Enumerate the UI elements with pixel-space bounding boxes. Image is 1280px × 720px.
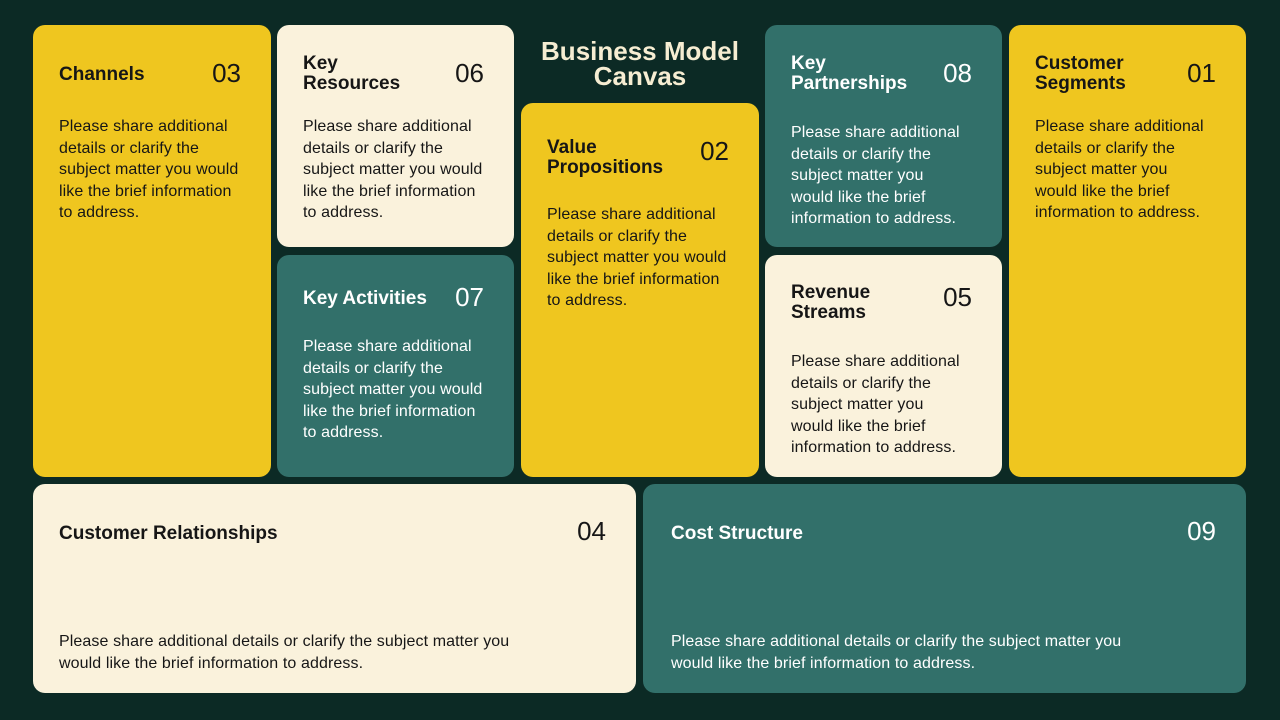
heading: key resources (303, 53, 400, 94)
panel: channels (33, 25, 271, 477)
text: value propositions body: subject matter you would (547, 249, 726, 266)
heading: key resources: Resources (303, 72, 400, 94)
title (541, 36, 739, 91)
number 03: 03 (212, 58, 241, 88)
text: key partnerships body: details or clarify the (791, 146, 931, 162)
panel: key activities (277, 255, 514, 477)
heading: customer segments (1035, 53, 1126, 94)
text: key partnerships body: subject matter you (791, 167, 924, 184)
text: key partnerships body (791, 124, 960, 227)
number 09: 09 (1187, 516, 1216, 546)
text: customer segments body: details or clarify the (1035, 140, 1175, 156)
heading: key partnerships (791, 53, 907, 94)
title: Business Model (541, 36, 739, 66)
text: customer relationships body: Please share additional details or clarify the subject matter you (59, 633, 509, 650)
heading: customer relationships: Customer Relationships (59, 523, 278, 544)
text: cost structure body (671, 633, 1121, 672)
text: channels body: to address. (59, 204, 139, 221)
number 04: 04 (577, 516, 606, 546)
text: key partnerships body: information to address. (791, 210, 956, 227)
text: revenue streams body: would like the brief (791, 418, 926, 434)
heading: customer segments: Segments (1035, 72, 1126, 94)
text: value propositions body: details or clarify the (547, 228, 687, 244)
text: key resources body: like the brief information (303, 182, 475, 200)
heading: key partnerships: Key (791, 53, 826, 74)
heading: value propositions: Value (547, 137, 597, 158)
text: channels body: Please share additional (59, 118, 228, 135)
text: channels body: details or clarify the (59, 140, 199, 156)
text: value propositions body: to address. (547, 292, 627, 309)
text: customer segments body: Please share additional (1035, 118, 1204, 135)
heading: cost structure: Cost Structure (671, 523, 803, 544)
text: value propositions body: Please share additional (547, 206, 716, 223)
text: cost structure body: Please share additional details or clarify the subject matter you (671, 633, 1121, 650)
heading: revenue streams: Streams (791, 302, 866, 322)
number 07: 07 (455, 282, 484, 312)
text: key activities body (303, 338, 482, 441)
text: customer relationships body: would like the brief information to address. (59, 654, 363, 672)
panel: cost structure (643, 484, 1246, 693)
heading: customer segments: Customer (1035, 53, 1124, 74)
text: key resources body: to address. (303, 204, 383, 221)
heading: channels: Channels (59, 64, 145, 85)
text: revenue streams body: information to address. (791, 439, 956, 456)
heading: revenue streams: Revenue (791, 282, 870, 303)
number 05: 05 (943, 282, 972, 312)
text: customer segments body: would like the brief (1035, 182, 1170, 200)
text: channels body (59, 118, 238, 221)
text: value propositions body: like the brief information (547, 270, 719, 288)
heading: key activities: Key Activities (303, 288, 427, 309)
number 01: 01 (1187, 58, 1216, 88)
heading: value propositions (547, 137, 663, 178)
number 08: 08 (943, 58, 972, 88)
text: key activities body: details or clarify the (303, 360, 443, 376)
text: channels body: like the brief information (59, 182, 231, 200)
text: revenue streams body: subject matter you (791, 396, 924, 413)
text: key activities body: like the brief information (303, 402, 475, 420)
text: key activities body: to address. (303, 424, 383, 441)
panel: revenue streams (765, 255, 1002, 477)
text: key partnerships body: Please share additional (791, 124, 960, 141)
text: revenue streams body: Please share additional (791, 353, 960, 370)
text: value propositions body (547, 206, 726, 309)
text: key activities body: subject matter you would (303, 381, 482, 398)
text: customer segments body: subject matter you (1035, 161, 1168, 178)
text: key resources body (303, 118, 482, 221)
text: revenue streams body: details or clarify the (791, 374, 931, 392)
heading: revenue streams (791, 282, 870, 322)
number 06: 06 (455, 58, 484, 88)
text: customer segments body (1035, 118, 1204, 221)
text: key activities body: Please share additional (303, 338, 472, 355)
heading: value propositions: Propositions (547, 156, 663, 178)
heading: key resources: Key (303, 53, 338, 74)
panel: customer relationships (33, 484, 636, 693)
text: revenue streams body (791, 353, 960, 456)
panel: customer segments (1009, 25, 1246, 477)
number 02: 02 (700, 136, 729, 166)
panel: value propositions (521, 103, 759, 477)
text: key partnerships body: would like the brief (791, 188, 926, 206)
panel: key resources (277, 25, 514, 247)
panel: key partnerships (765, 25, 1002, 247)
text: key resources body: Please share additional (303, 118, 472, 135)
text: channels body: subject matter you would (59, 161, 238, 178)
text: customer segments body: information to address. (1035, 204, 1200, 221)
text: cost structure body: would like the brief information to address. (671, 654, 975, 672)
heading: key partnerships: Partnerships (791, 72, 907, 94)
text: key resources body: details or clarify the (303, 140, 443, 156)
text: customer relationships body (59, 633, 509, 672)
title: Canvas (594, 61, 686, 91)
text: key resources body: subject matter you would (303, 161, 482, 178)
